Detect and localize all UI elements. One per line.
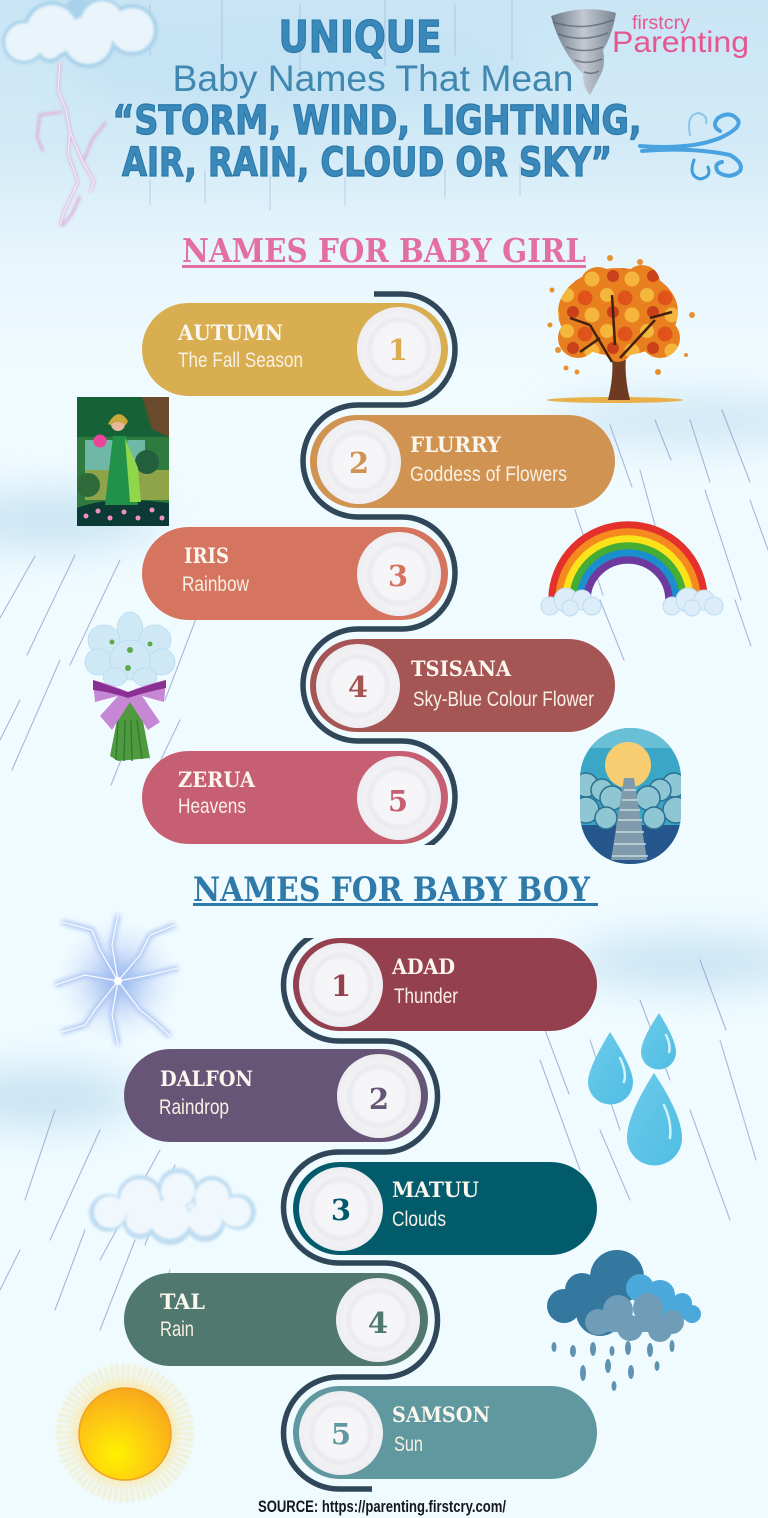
panel: boy name 2 Dalfon (124, 1049, 428, 1142)
icon: sun (67, 1375, 183, 1491)
panel: girl name 2 Flurry: FLURRY (410, 433, 502, 458)
panel: girl name 2 Flurry: Goddess of Flowers (410, 462, 567, 486)
panel: boy name 4 Tal: Rain (160, 1317, 194, 1341)
panel: girl name 4 Tsisana: 4 (348, 670, 368, 704)
panel: boy name 1 Adad: ADAD (391, 955, 455, 980)
icon: white cloud (89, 1168, 256, 1245)
icon: flower goddess picture (76, 397, 169, 526)
title: UNIQUE (278, 12, 442, 63)
panel: girl name 4 Tsisana (310, 639, 615, 732)
icon: rain cloud with drops (547, 1250, 701, 1391)
panel: boy name 3 Matuu (293, 1162, 597, 1255)
panel: girl name 3 Iris: 3 (388, 559, 408, 593)
panel: boy name 4 Tal (124, 1273, 428, 1366)
panel: boy name 1 Adad (293, 938, 597, 1031)
title: Baby Names That Mean (172, 58, 574, 99)
panel: boy name 5 Samson: SAMSON (392, 1403, 490, 1428)
icon: tornado (551, 9, 616, 95)
panel: boy name 4 Tal: TAL (160, 1290, 205, 1315)
panel: girl name serpentine connector (303, 294, 455, 853)
panel: boy name serpentine connector (284, 929, 438, 1489)
panel: boy name 2 Dalfon: DALFON (160, 1067, 253, 1092)
icon: autumn tree (547, 255, 695, 403)
logo: firstcry parenting (612, 13, 749, 59)
panel: boy name 1 Adad: Thunder (394, 984, 458, 1008)
icon: raindrops (588, 1013, 682, 1166)
title: AIR, RAIN, CLOUD OR SKY” (122, 140, 612, 186)
panel: girl name 1 Autumn: The Fall Season (178, 348, 303, 372)
panel: boy name 3 Matuu: Clouds (392, 1207, 446, 1231)
icon: storm cloud with lightning (2, 0, 158, 226)
icon: sky-blue flower bouquet (85, 612, 175, 761)
panel: boy name 3 Matuu: MATUU (392, 1178, 479, 1203)
panel: boy name 5 Samson: Sun (394, 1432, 423, 1456)
panel: boy name 2 Dalfon: Raindrop (159, 1095, 229, 1119)
logo: firstcry parenting: Parenting (612, 26, 749, 59)
icon: wind (640, 113, 741, 179)
title: “STORM, WIND, LIGHTNING, (112, 98, 642, 144)
panel: girl name 3 Iris (142, 527, 448, 620)
panel: girl name 5 Zerua: 5 (388, 784, 408, 818)
title (112, 12, 642, 186)
panel: girl name 5 Zerua (142, 751, 448, 844)
panel: boy name 3 Matuu: 3 (331, 1193, 351, 1227)
panel: girl name 2 Flurry (310, 415, 615, 508)
panel: boy name 1 Adad: 1 (331, 969, 351, 1003)
panel: girl name 3 Iris: IRIS (184, 544, 229, 569)
panel: girl name 2 Flurry: 2 (349, 446, 369, 480)
panel: girl name 1 Autumn (142, 303, 448, 396)
panel: girl name 4 Tsisana: TSISANA (411, 657, 511, 682)
panel: boy name 5 Samson: 5 (331, 1417, 351, 1451)
panel: boy name 5 Samson (293, 1386, 597, 1479)
panel: boy name 4 Tal: 4 (368, 1306, 388, 1340)
logo: firstcry parenting: firstcry (632, 13, 691, 34)
icon: stairway to heaven (580, 728, 681, 864)
panel: girl name 5 Zerua: Heavens (178, 794, 246, 818)
icon: lightning burst (55, 915, 180, 1045)
panel: girl name 1 Autumn: AUTUMN (177, 321, 283, 346)
panel: girl name 3 Iris: Rainbow (182, 572, 249, 596)
panel: girl name 4 Tsisana: Sky-Blue Colour Flower (413, 687, 594, 711)
icon: rainbow (541, 525, 723, 616)
panel: girl name 1 Autumn: 1 (388, 333, 408, 367)
heading: names for baby boy: NAMES FOR BABY BOY (193, 870, 591, 910)
heading: names for baby girl: NAMES FOR BABY GIRL (182, 231, 586, 270)
panel: girl name 5 Zerua: ZERUA (178, 768, 255, 793)
panel: boy name 2 Dalfon: 2 (369, 1082, 389, 1116)
source line: SOURCE: https://parenting.firstcry.com/ (258, 1497, 506, 1516)
